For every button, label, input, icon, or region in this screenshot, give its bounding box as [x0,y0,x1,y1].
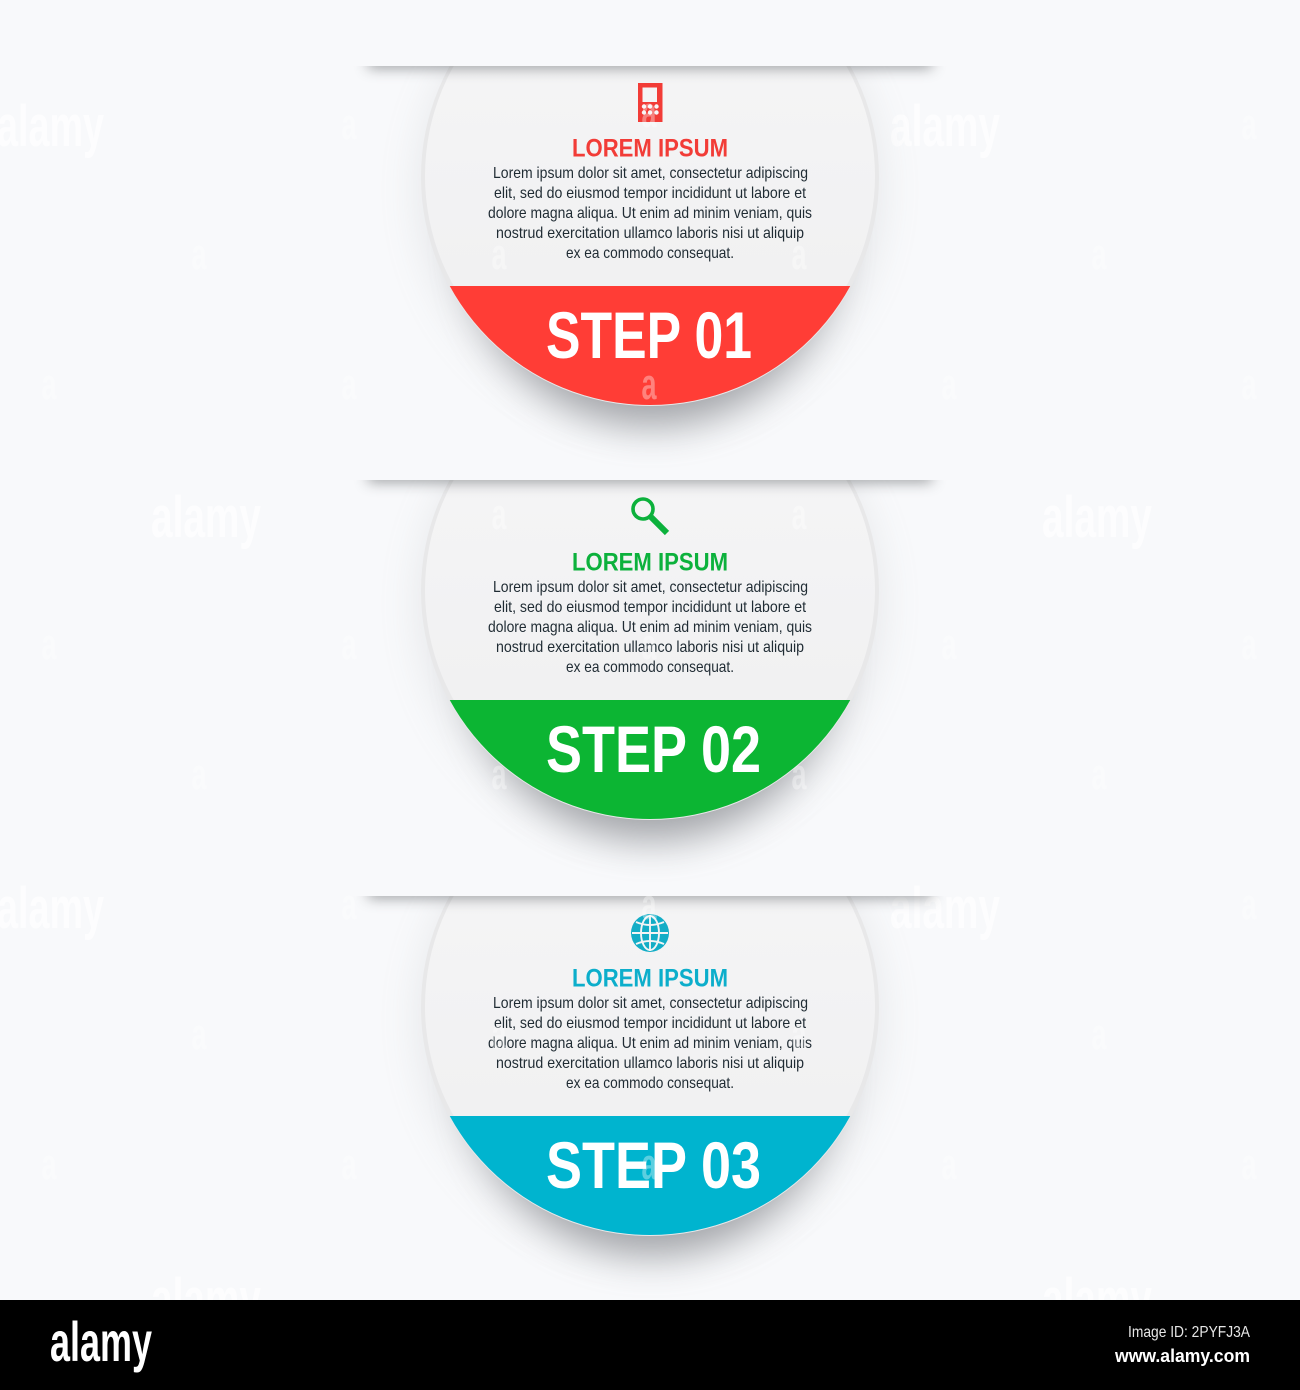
watermark text: alamy [1042,485,1152,550]
watermark text: alamy [151,485,261,550]
watermark text: alamy [151,1267,261,1332]
heading: step 02: LOREM IPSUM [572,548,728,576]
watermark text [0,94,1152,1332]
watermark text: alamy [1042,1267,1152,1332]
label: STEP 03: STEP 03 [546,1128,761,1202]
card: step 03 disc [368,778,932,1255]
label: STEP 02: STEP 02 [546,712,761,786]
card: step 01 disc [368,0,932,425]
heading: step 03: LOREM IPSUM [572,964,728,992]
icon: magnifying glass [633,499,667,533]
watermark text: alamy [890,94,1000,159]
label: STEP 01: STEP 01 [546,298,752,372]
text block: step 02 [488,579,812,676]
watermark text: alamy [890,876,1000,941]
watermark text: alamy [0,94,104,159]
text block: step 01 [488,165,812,262]
band: step 02 green [450,700,850,819]
watermark marks [42,88,1257,1189]
panel: step 01 [368,0,932,425]
band: step 03 blue [450,1116,850,1235]
text block: step 03 [488,995,812,1092]
footer logo: alamy [50,1310,152,1373]
panel: step 03 [361,896,939,1280]
band: step 01 red [450,286,850,405]
footer image id: Image ID: 2PYFJ3A [1128,1324,1250,1341]
heading: step 01: LOREM IPSUM [572,134,728,162]
footer url: www.alamy.com [1114,1346,1250,1366]
footer bar [0,1300,1300,1390]
watermark text: alamy [0,876,104,941]
card: step 02 disc [368,362,932,839]
icon: mobile phone [638,83,662,122]
panel: step 02 [361,480,939,864]
icon: globe [631,914,669,952]
